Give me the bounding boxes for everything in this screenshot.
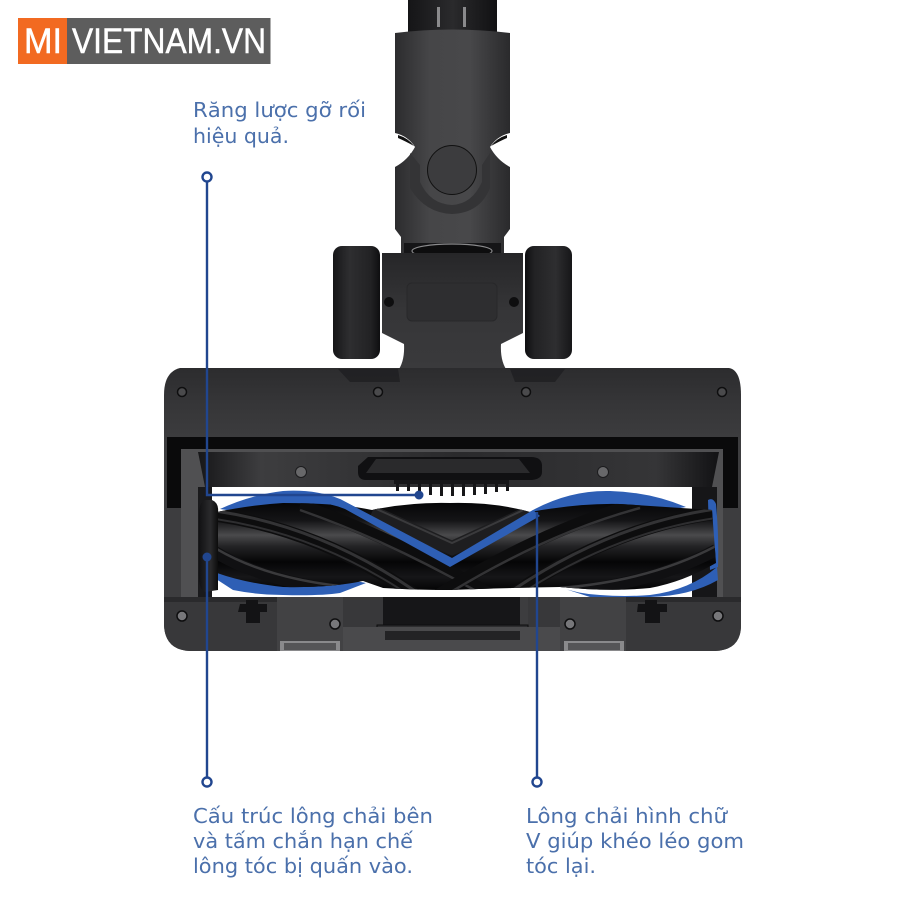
V shaped blue bristle bbox=[317, 499, 540, 567]
right clip bbox=[637, 600, 667, 623]
wand tube bbox=[408, 0, 497, 32]
bottom front housing bbox=[164, 597, 741, 651]
left roller end cap bbox=[199, 500, 218, 592]
left clip bbox=[238, 600, 267, 623]
right wheel bbox=[525, 246, 572, 359]
roller body bbox=[217, 503, 716, 590]
blue side bristles bbox=[213, 491, 718, 597]
logo: MI bbox=[24, 22, 62, 61]
callout line: comb teeth bbox=[202, 172, 424, 500]
text: side bristles: Cấu trúc lông chải bên bbox=[193, 804, 433, 828]
screws on front housing bbox=[177, 611, 723, 629]
comb teeth block bbox=[358, 457, 542, 496]
neck ring bbox=[404, 243, 501, 262]
text: V bristles: V giúp khéo léo gom bbox=[526, 829, 744, 853]
shadow under neck bbox=[338, 369, 400, 382]
swivel collar bbox=[395, 30, 510, 256]
logo bbox=[18, 18, 270, 64]
text: V bristles: tóc lại. bbox=[526, 854, 596, 878]
brush head housing bbox=[164, 368, 741, 651]
inner gray frame bbox=[181, 449, 723, 597]
text: comb teeth: Răng lược gỡ rối bbox=[193, 98, 366, 122]
text: V bristles: Lông chải hình chữ bbox=[526, 804, 728, 828]
white roller opening bbox=[205, 487, 716, 597]
panel screws bbox=[296, 466, 306, 478]
cross body bbox=[382, 253, 523, 372]
left wheel bbox=[333, 246, 380, 359]
callout line: V bristles bbox=[532, 512, 542, 786]
logo: VIETNAM.VN bbox=[72, 22, 266, 61]
text: side bristles: lông tóc bị quấn vào. bbox=[193, 854, 413, 878]
black slot frame bbox=[167, 437, 738, 508]
inner rear panel bbox=[198, 452, 719, 487]
callout line: side bristles bbox=[202, 552, 212, 786]
text: side bristles: và tấm chắn hạn chế bbox=[193, 829, 414, 853]
text: comb teeth: hiệu quả. bbox=[193, 124, 289, 148]
screws on housing bbox=[178, 388, 726, 396]
vacuum floor brush product image bbox=[164, 0, 741, 651]
roller spiral ribs bbox=[218, 503, 716, 590]
